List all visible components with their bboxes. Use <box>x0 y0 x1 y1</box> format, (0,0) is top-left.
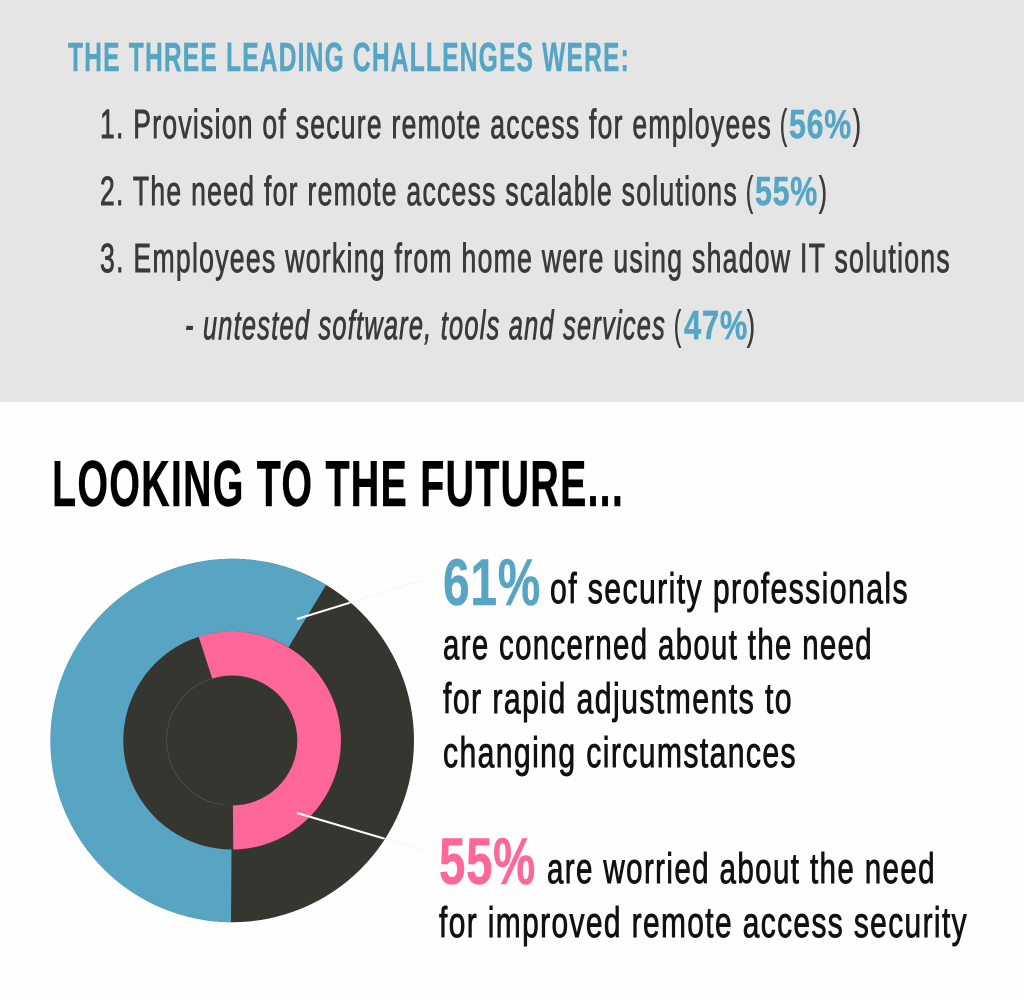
list item 1: 56% <box>789 101 852 147</box>
middle ring dark <box>123 632 341 850</box>
callout: 61% <box>443 545 909 777</box>
list item 3 note: ) <box>747 302 756 348</box>
stat 55%: 55% <box>439 824 536 898</box>
panel: three leading challenges <box>0 0 1024 402</box>
list item 2: ) <box>819 168 828 214</box>
leader line: 55% <box>297 813 423 850</box>
callout text line 4: changing circumstances <box>443 729 797 777</box>
list item 2: 55% <box>755 168 818 214</box>
inner circle <box>167 676 297 806</box>
outer ring blue 61% <box>50 559 326 922</box>
list item 3 note: 47% <box>684 302 748 348</box>
callout text line 3: for rapid adjustments to <box>443 675 793 723</box>
donut chart <box>50 559 423 922</box>
leader line: 61% <box>297 580 423 619</box>
inner circle hairline <box>167 678 225 805</box>
list item 3 note: ( <box>674 302 682 348</box>
list item 1: ( <box>780 101 788 147</box>
middle ring pink 55% <box>199 632 341 850</box>
outer ring dark <box>51 559 414 922</box>
heading: three leading challenges: THE THREE LEADING CHALLENGES WERE: <box>68 34 630 80</box>
callout: 55% <box>439 824 968 947</box>
stat 61%: 61% <box>443 545 541 619</box>
list item 2: ( <box>746 168 754 214</box>
list item 3 note: - untested software, tools and services <box>185 302 666 348</box>
list item 1: ) <box>853 101 862 147</box>
heading: looking to the future: LOOKING TO THE FUTURE... <box>52 447 624 520</box>
